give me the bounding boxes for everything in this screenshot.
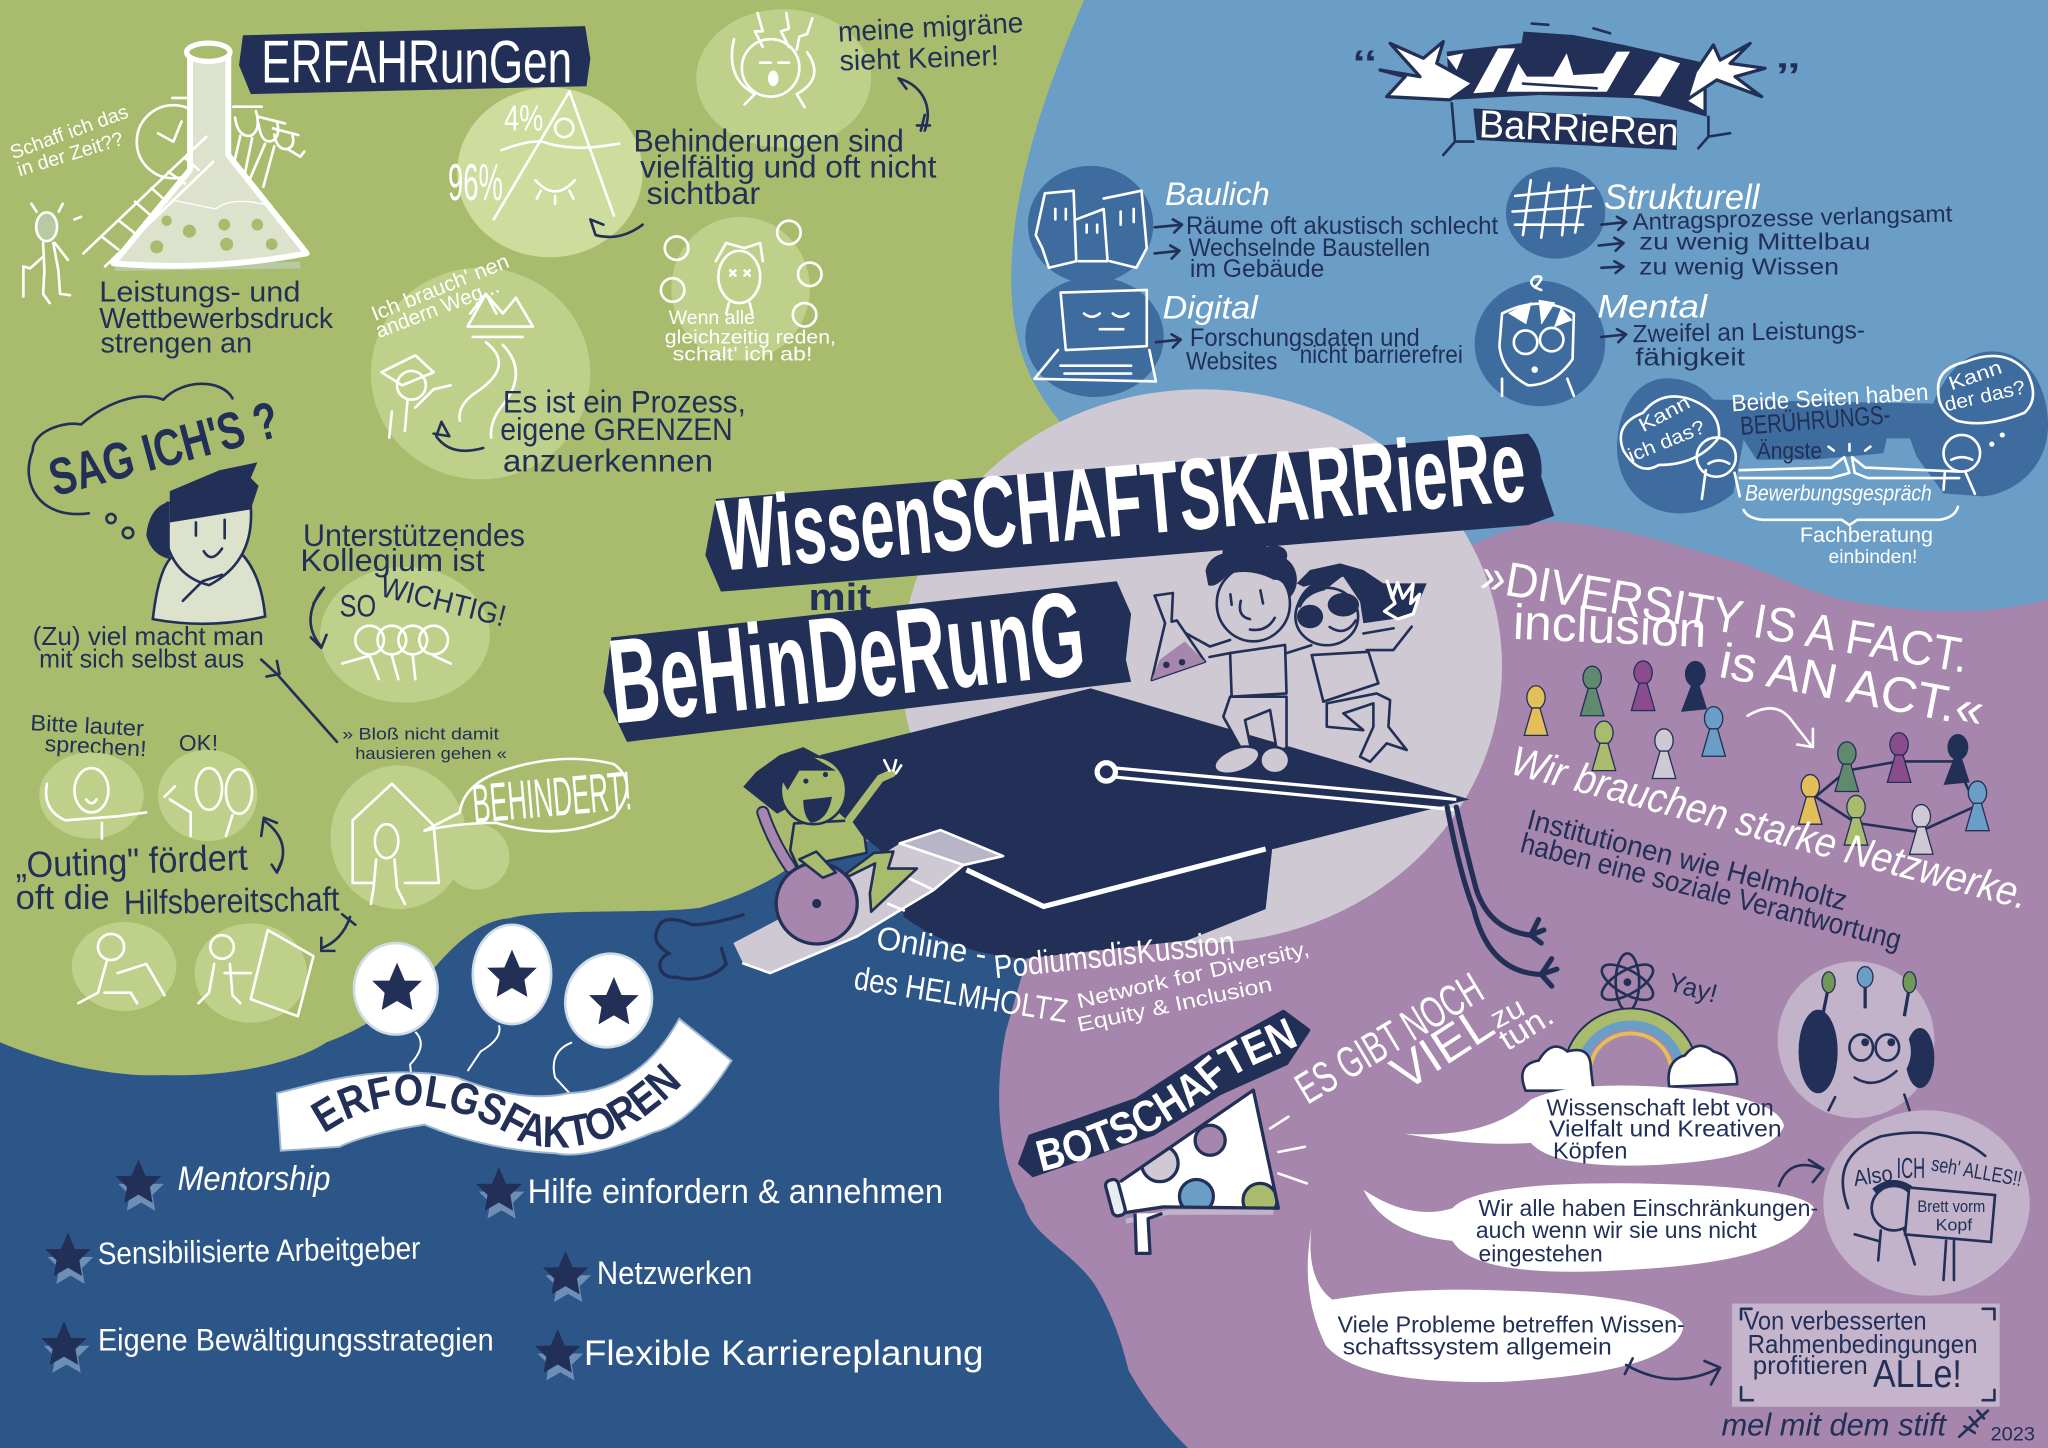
icon: separate people: [1524, 661, 1725, 778]
text: Es gibt noch viel zu tun: VIEL: [1381, 994, 1503, 1101]
text: Mental: fähigkeit: [1635, 345, 1745, 372]
text: Mental: Zweifel an Leistungs-: [1632, 317, 1865, 348]
text: Bloss nicht damit hausieren: » Bloß nicht damit: [342, 724, 499, 743]
callout: Kann ich das: Kann: [1635, 392, 1694, 437]
icon: person with crutch: [72, 922, 176, 1011]
text: Baulich: Wechselnde Baustellen: [1189, 235, 1430, 262]
icon: left and right persons: [1697, 432, 2005, 499]
list item: Netzwerken: Netzwerken: [597, 1254, 752, 1291]
icon: person in wheelchair: [743, 747, 917, 944]
text: Outing foerdert: oft die: [16, 879, 110, 917]
callout: Viele Probleme: Viele Probleme betreffen Wissen-: [1337, 1311, 1685, 1337]
list item: Flexible Karriereplanung: [535, 1329, 984, 1381]
text: Institutionen wie Helmholtz: Institutionen wie Helmholtz: [1524, 804, 1850, 917]
heading: Botschaften banner: BOTSCHAFTEN: [1036, 1018, 1298, 1172]
arrow: migraine to text: [899, 78, 930, 131]
text: Mental: Mental: [1597, 287, 1708, 324]
text: Ich brauch nen andern Weg: andern Weg...: [372, 275, 503, 343]
arrow: outing to helpers: [261, 818, 283, 873]
callout box: Von verbesserten Rahmenbedingungen: Rahmenbedingungen: [1748, 1329, 1977, 1359]
text: Baulich: Räume oft akustisch schlecht: [1186, 213, 1498, 240]
text: Diversity quote: inclusion: [1512, 594, 1708, 658]
icon: board in front of head circle: Kopf: [1936, 1215, 1973, 1234]
icon: board in front of head circle: seh' ALLES!!: [1930, 1153, 2024, 1191]
title banner: Behinderung: BeHinDeRunG: [603, 566, 1091, 749]
text: zu viel macht man: mit sich selbst aus: [39, 643, 244, 673]
text: Strukturell: zu wenig Wissen: [1639, 253, 1839, 279]
text: Baulich: [1155, 175, 1498, 283]
icon: brace: [1744, 507, 1958, 525]
text: Outing foerdert: „Outing" fördert: [15, 837, 248, 886]
text: Es gibt noch viel zu tun: [1287, 964, 1560, 1114]
text: signature: [1721, 1407, 2035, 1446]
text: Beide Seiten haben: Beide Seiten haben: [1731, 379, 1929, 416]
icon: board in front of head circle: ICH: [1896, 1153, 1925, 1185]
text: mit: mit: [808, 577, 872, 619]
text: Bloss nicht damit hausieren: hausieren gehen «: [355, 744, 507, 763]
text: Outing foerdert: [15, 837, 340, 922]
arrow: text to path: [434, 422, 483, 451]
text: Digital: Forschungsdaten und: [1190, 325, 1420, 352]
arrow: people to network: [1748, 708, 1813, 747]
heading: Barrieren wall banner: “: [1353, 42, 1377, 91]
text: Wenn alle gleichzeitig reden: schalt' ich ab!: [673, 343, 812, 365]
icon: house with person: [330, 765, 509, 909]
text: Es gibt noch viel zu tun: zu: [1485, 991, 1530, 1035]
heading: Barrieren wall banner: BaRRieRen: [1478, 103, 1680, 155]
text: meine Migräne: meine migräne: [837, 7, 1024, 49]
text: Ich brauch nen andern Weg: Ich brauch' nen: [368, 250, 512, 326]
list item: Hilfe einfordern und annehmen: [476, 1167, 943, 1219]
text: Strukturell: Antragsprozesse verlangsamt: [1632, 201, 1953, 235]
text: Schaff ich das: in der Zeit??: [15, 128, 126, 181]
text: Wenn alle gleichzeitig reden: Wenn alle: [669, 307, 755, 329]
text: Es ist ein Prozess: Es ist ein Prozess,: [503, 385, 746, 420]
text: Online-Podiumsdiskussion: PodiumsdisKussion: [992, 923, 1236, 985]
text: Online-Podiumsdiskussion: Network for Diversity,: [1075, 937, 1312, 1013]
icon: handshake across table: [1740, 444, 1959, 478]
icon: iceberg mountain 4 and 96 percent: [448, 88, 643, 257]
text: Unterstuetzendes Kollegium: Kollegium ist: [300, 543, 485, 578]
panel: Bewerbungsgespraech: [1617, 351, 2048, 568]
background: purple messages area: [999, 521, 2048, 1448]
arrow: bubble to box: [1625, 1358, 1720, 1385]
callout: Kann der das: [1938, 356, 2033, 423]
text: so wichtig: WICHTIG!: [377, 570, 509, 633]
text: Es gibt noch viel zu tun: ES GIBT NOCH: [1287, 964, 1492, 1114]
text: Bitte lauter sprechen: [30, 710, 218, 761]
callout: Viele Probleme: schaftssystem allgemein: [1343, 1333, 1612, 1359]
icon: plant head circle: [1778, 961, 1934, 1118]
callout: Sag ichs thought cloud: [29, 384, 285, 538]
icon: person holding door: [195, 923, 313, 1023]
icon: person with cane: [23, 204, 81, 303]
text: Digital: Websites: [1186, 349, 1277, 376]
icon: board in front of head circle: [1823, 1110, 2030, 1296]
arrow: iceberg to text: [590, 219, 643, 237]
title banner: Wissenschaftskarriere: [705, 409, 1554, 593]
icon: paper ramp: [733, 830, 1003, 973]
text: Fachberatung einbinden: Fachberatung: [1800, 524, 1933, 547]
callout: Wissenschaft lebt von Vielfalt: [1404, 1086, 1784, 1166]
list item: Hilfe einfordern und annehmen: Hilfe einfordern & annehmen: [528, 1173, 943, 1211]
icon: megaphone: [1104, 1090, 1307, 1253]
panel: barrieren: [1025, 24, 2048, 568]
title banner: Wissenschaftskarriere: WissenSCHAFTSKARRieRe: [713, 409, 1530, 593]
icon: speaking person: [39, 752, 146, 839]
text: so wichtig: SO: [340, 589, 376, 624]
text: Fachberatung einbinden: [1800, 524, 1933, 568]
text: signature: 2023: [1991, 1424, 2035, 1446]
list item: Mentorship: [116, 1159, 330, 1211]
text: zu viel macht man: [33, 621, 264, 673]
text: Es ist ein Prozess: eigene GRENZEN: [500, 412, 733, 447]
panel: erfolgsfaktoren: [41, 924, 984, 1380]
callout: Wissenschaft lebt von Vielfalt: Wissenschaft lebt von: [1546, 1094, 1774, 1120]
text: Leistungsdruck: [99, 277, 334, 360]
text: Unterstuetzendes Kollegium: Unterstützendes: [303, 518, 525, 553]
icon: atom and Yay: Yay!: [1665, 967, 1721, 1009]
title: Wissenschaftskarriere mit Behinderung: [603, 409, 1554, 749]
text: Diversity quote: »DIVERSITY IS A FACT.: [1477, 548, 1973, 684]
text: Bitte lauter sprechen: sprechen!: [44, 731, 147, 761]
list item: Sensibilisierte Arbeitgeber: [45, 1231, 421, 1284]
text: Beruehrungsaengste: BERÜHRUNGS-: [1739, 399, 1891, 441]
arrow: text to migraine: [921, 115, 925, 131]
text: Online-Podiumsdiskussion: Online -: [874, 919, 989, 973]
text: Institutionen wie Helmholtz: haben eine soziale Verantwortung: [1517, 827, 1905, 956]
list item: Netzwerken: [543, 1251, 752, 1302]
panel: erfahrungen: BEHINDERT!: [470, 759, 634, 835]
text: Es gibt noch viel zu tun: tun.: [1492, 997, 1560, 1057]
icon: sad computer: [1025, 277, 1164, 397]
heading: Barrieren wall banner: ”: [1776, 55, 1800, 104]
text: Fachberatung einbinden: einbinden!: [1829, 546, 1917, 568]
arrow: help to helper icon: [321, 914, 355, 951]
panel: botschaften: [1018, 952, 2035, 1446]
heading banner: Erfahrungen: ERFAHRunGen: [261, 28, 572, 95]
callout: Kann ich das: ich das?: [1625, 416, 1708, 467]
callout: Kann ich das: [1621, 392, 1719, 469]
callout: Wissenschaft lebt von Vielfalt: Vielfalt und Kreativen: [1549, 1115, 1782, 1141]
text: Leistungsdruck: Wettbewerbsdruck: [99, 303, 334, 335]
background: blue barriers area: [1011, 0, 2048, 731]
icon: thinking man: [146, 462, 265, 624]
text: Es ist ein Prozess: anzuerkennen: [503, 444, 713, 479]
icon: winding path with graduate: [371, 268, 590, 479]
text: Online-Podiumsdiskussion: [852, 919, 1312, 1037]
text: Online-Podiumsdiskussion: Equity & Inclusion: [1075, 973, 1274, 1037]
title banner: Behinderung: [603, 566, 1131, 749]
icon: board in front of head circle: Brett vorm: [1917, 1197, 1985, 1216]
icon: tassel: [1447, 807, 1557, 986]
text: Behinderungen sind vielfaeltig: vielfältig und oft nicht: [640, 150, 937, 185]
icon: board in front of head circle: Also: [1852, 1161, 1894, 1191]
text: Wenn alle gleichzeitig reden: [665, 307, 836, 365]
text: Beruehrungsaengste: [1739, 399, 1891, 463]
callout: Kann der das: Kann: [1946, 357, 2005, 395]
arrow: man to quote: [261, 660, 337, 742]
icon: atom and Yay: [1597, 953, 1721, 1011]
text: Digital: [1156, 289, 1463, 376]
callout: Kann der das: der das?: [1942, 376, 2028, 416]
list item: Eigene Bewaeltigungsstrategien: Eigene Bewältigungsstrategien: [98, 1323, 494, 1358]
callout: Wissenschaft lebt von Vielfalt: Köpfen: [1553, 1138, 1627, 1164]
list item: Flexible Karriereplanung: Flexible Karriereplanung: [584, 1334, 984, 1373]
icon: flask with ladder and clock: [83, 43, 307, 268]
callout: Sag ichs thought cloud: SAG ICH'S ?: [43, 391, 285, 508]
text: Schaff ich das: Schaff ich das: [7, 101, 132, 164]
text: Baulich: Baulich: [1165, 175, 1270, 212]
icon: supportive colleagues: [320, 567, 490, 703]
heading: Erfolgsfaktoren ribbon: ERFOLGSFAKTOREN: [310, 1063, 682, 1148]
background: lilac centre circle: [901, 389, 1502, 943]
icon: two helpers: [158, 750, 257, 841]
text: Wenn alle gleichzeitig reden: gleichzeitig reden,: [665, 327, 836, 349]
text: Bitte lauter sprechen: Bitte lauter: [30, 710, 145, 741]
icon: tangled grid: [1506, 167, 1605, 259]
text: Beruehrungsaengste: Ängste: [1757, 437, 1822, 463]
callout box: Von verbesserten Rahmenbedingungen: profitieren: [1753, 1350, 1868, 1380]
text: Bitte lauter sprechen: OK!: [179, 730, 218, 756]
text: Leistungsdruck: Leistungs- und: [99, 277, 300, 309]
text: Strukturell: zu wenig Mittelbau: [1639, 228, 1870, 254]
icon: friend with sunglasses: [1287, 563, 1427, 762]
text: Unterstuetzendes Kollegium: [300, 518, 525, 578]
panel: erfahrungen: [7, 7, 1024, 1023]
text: zu viel macht man: (Zu) viel macht man: [33, 621, 264, 651]
text: signature: mel mit dem stift: [1721, 1407, 1947, 1442]
text: meine Migräne: [837, 7, 1024, 78]
text: Digital: Digital: [1162, 289, 1259, 326]
text: Strukturell: Strukturell: [1604, 178, 1760, 217]
text: Behinderungen sind vielfaeltig: sichtbar: [647, 176, 760, 211]
icon: iceberg mountain 4 and 96 percent: 4%: [504, 98, 543, 139]
icon: balloons: [354, 925, 662, 1095]
panel: diversity and networks: [1477, 548, 2033, 956]
callout: Wir alle haben Einschraenkungen: Wir alle haben Einschränkungen-: [1479, 1195, 1818, 1221]
text: Es ist ein Prozess: [500, 385, 746, 479]
callout: Wir alle haben Einschraenkungen: auch wenn wir sie uns nicht: [1476, 1217, 1757, 1243]
heading: Barrieren wall banner: [1353, 24, 1800, 155]
callout: Wir alle haben Einschraenkungen: [1364, 1183, 1818, 1272]
list item: Mentorship: Mentorship: [178, 1160, 330, 1198]
list item: Eigene Bewaeltigungsstrategien: [41, 1321, 494, 1373]
background: dark blue success factors area: [0, 841, 1254, 1448]
icon: rainbow with clouds: [1522, 1018, 1737, 1091]
text: Bloss nicht damit hausieren: [342, 724, 507, 763]
text: Digital: nicht barrierefrei: [1300, 342, 1463, 369]
callout box: Von verbesserten Rahmenbedingungen: Von verbesserten: [1744, 1306, 1927, 1336]
icon: exhaust cloud: [656, 914, 744, 979]
callout box: Von verbesserten Rahmenbedingungen: ALLe!: [1873, 1353, 1962, 1396]
text: meine Migräne: sieht Keiner!: [839, 40, 999, 78]
arrow: bubble to sign: [1779, 1160, 1823, 1186]
list item: Sensibilisierte Arbeitgeber: Sensibilisierte Arbeitgeber: [97, 1231, 421, 1271]
text: Online-Podiumsdiskussion: des HELMHOLTZ: [852, 959, 1070, 1029]
text: Mental: [1597, 287, 1865, 372]
icon: blue blobs: [1617, 351, 2048, 513]
text: Strukturell: [1599, 178, 1953, 279]
callout: Viele Probleme: [1308, 1229, 1685, 1382]
icon: iceberg mountain 4 and 96 percent: 96%: [448, 154, 503, 212]
icon: doubting head: [1475, 276, 1605, 406]
panel: graduation cap illustration: [656, 542, 1557, 1037]
text: Behinderungen sind vielfaeltig: Behinderungen sind: [633, 124, 904, 159]
callout: Wir alle haben Einschraenkungen: eingestehen: [1479, 1241, 1603, 1267]
icon: connected people ring: [1799, 733, 1989, 854]
text: Leistungsdruck: strengen an: [101, 328, 252, 360]
text: Baulich: im Gebäude: [1190, 256, 1324, 283]
icon: group talking at once: [661, 217, 822, 360]
text: Bewerbungsgespraech: Bewerbungsgespräch: [1745, 480, 1932, 505]
icon: sad buildings: [1028, 166, 1153, 283]
heading: Erfolgsfaktoren ribbon: [276, 1017, 733, 1156]
text: Behinderungen sind vielfaeltig: [633, 124, 937, 211]
arrow: so wichtig loop: [311, 588, 327, 648]
text: Diversity quote: is AN ACT.«: [1715, 632, 1989, 738]
icon: scientist with flask: [1152, 542, 1297, 779]
text: Outing foerdert: Hilfsbereitschaft: [124, 881, 340, 922]
icon: migraine head: [696, 9, 871, 148]
callout box: Von verbesserten Rahmenbedingungen: [1732, 1304, 2000, 1407]
icon: graduation cap: [820, 688, 1469, 959]
callout: Behindert speech bubble: [424, 759, 634, 835]
